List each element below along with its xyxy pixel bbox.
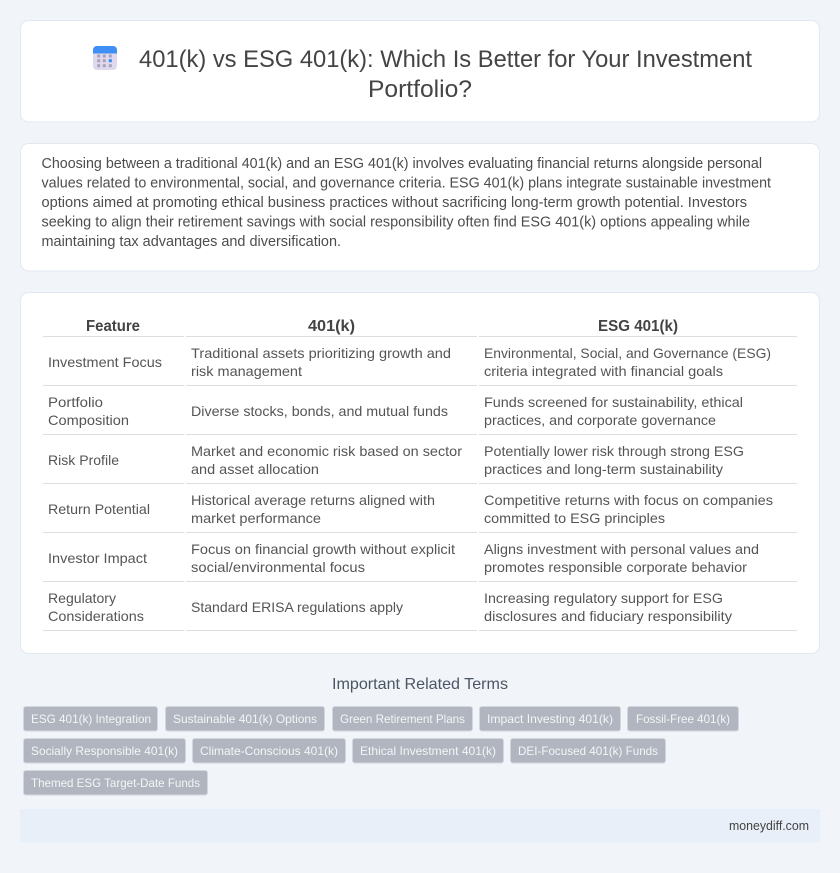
table row: regulatory considerations: Considerations [48, 608, 144, 624]
title [139, 46, 752, 103]
tag [510, 738, 666, 763]
tag [192, 738, 346, 763]
tag: Fossil-Free 401(k) [636, 712, 730, 726]
panel: comparison table [20, 292, 820, 654]
table row: regulatory considerations: Regulatory [48, 590, 116, 606]
table row: regulatory considerations: disclosures and fiduciary responsibility [484, 608, 732, 624]
table row: return potential [48, 492, 773, 526]
tag: Climate-Conscious 401(k) [200, 744, 338, 758]
table row: risk profile: and asset allocation [191, 461, 319, 477]
text block: introduction paragraph [42, 156, 771, 250]
table row: risk profile: Risk Profile [48, 452, 119, 468]
heading: important related terms: Important Related Terms [332, 676, 508, 693]
tag: Socially Responsible 401(k) [31, 744, 178, 758]
tag [166, 706, 324, 731]
table row: investment focus [48, 345, 771, 379]
tag [24, 738, 186, 763]
table row: regulatory considerations: Standard ERISA regulations apply [191, 599, 403, 615]
table row: risk profile: Market and economic risk based on sector [191, 443, 462, 459]
table row: return potential: committed to ESG principles [484, 510, 665, 526]
table row: return potential: Return Potential [48, 501, 150, 517]
panel: header [20, 20, 820, 122]
tag [480, 706, 620, 731]
tag: Sustainable 401(k) Options [173, 712, 317, 726]
table row: portfolio composition: Portfolio [48, 394, 103, 410]
table row: investor impact [48, 541, 759, 575]
tag: ESG 401(k) Integration [31, 712, 151, 726]
table row: investment focus: risk management [191, 363, 302, 379]
table row: portfolio composition [48, 394, 743, 428]
table row: return potential: Historical average returns aligned with [191, 492, 435, 508]
table row: portfolio composition: Diverse stocks, bonds, and mutual funds [191, 403, 448, 419]
table row: investor impact: Focus on financial growth without explicit [191, 541, 455, 557]
tag: Green Retirement Plans [340, 712, 465, 726]
table row: regulatory considerations [48, 590, 732, 624]
table header row: ESG 401(k) [598, 318, 678, 335]
table header row: Feature [86, 318, 140, 335]
table row: investor impact: social/environmental focus [191, 559, 365, 575]
text block: introduction paragraph: values related to environmental, social, and governance criteria. ESG 401(k) plans integrate sustainable investment [42, 176, 771, 192]
table row: investor impact: promotes responsible corporate behavior [484, 559, 747, 575]
tag [352, 738, 504, 763]
table row: portfolio composition: Funds screened for sustainability, ethical [484, 394, 743, 410]
table row: portfolio composition: Composition [48, 412, 129, 428]
panel: related term tags [24, 706, 738, 795]
icon: calendar [93, 46, 117, 70]
table row: return potential: Competitive returns with focus on companies [484, 492, 773, 508]
table row: investment focus: Environmental, Social, and Governance (ESG) [484, 345, 771, 361]
tag: DEI-Focused 401(k) Funds [518, 744, 658, 758]
tag [24, 706, 158, 731]
tag: Themed ESG Target-Date Funds [31, 776, 200, 790]
footer: moneydiff.com [729, 819, 809, 833]
table row: investment focus: Traditional assets prioritizing growth and [191, 345, 451, 361]
text block: introduction paragraph: Choosing between a traditional 401(k) and an ESG 401(k) involves evaluating financial returns alongside personal [42, 156, 762, 172]
title: 401(k) vs ESG 401(k): Which Is Better for Your Investment [139, 46, 752, 73]
table row: risk profile: Potentially lower risk through strong ESG [484, 443, 744, 459]
table row: regulatory considerations: Increasing regulatory support for ESG [484, 590, 723, 606]
table header row: 401(k) [308, 318, 355, 335]
table row: investor impact: Investor Impact [48, 550, 147, 566]
tag [332, 706, 472, 731]
table row: return potential: market performance [191, 510, 321, 526]
text block: introduction paragraph: seeking to align their retirement savings with social responsibility often find ESG 401(k) options appealing while [42, 214, 750, 230]
panel: introduction [20, 144, 820, 271]
table header row [86, 318, 678, 335]
tag [24, 770, 208, 795]
text block: introduction paragraph: maintaining tax advantages and diversification. [42, 234, 341, 250]
title: Portfolio? [368, 76, 472, 103]
text block: introduction paragraph: options aimed at promoting ethical business practices without sacrificing long-term growth potential. Investors [42, 195, 747, 211]
table row: investment focus: Investment Focus [48, 354, 162, 370]
table row: portfolio composition: practices, and corporate governance [484, 412, 716, 428]
tag [628, 706, 738, 731]
table row: investor impact: Aligns investment with personal values and [484, 541, 759, 557]
table row: risk profile: practices and long-term sustainability [484, 461, 723, 477]
tag: Impact Investing 401(k) [487, 712, 613, 726]
tag: Ethical Investment 401(k) [360, 744, 496, 758]
footer [20, 809, 820, 842]
table row: investment focus: criteria integrated with financial goals [484, 363, 723, 379]
table row: risk profile [48, 443, 744, 477]
